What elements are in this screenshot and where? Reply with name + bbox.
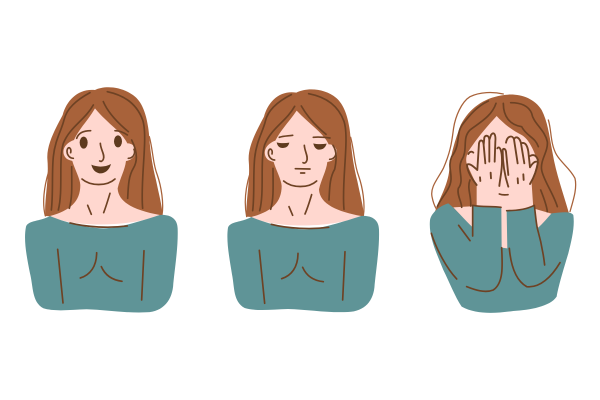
chin	[499, 191, 508, 197]
sleeve cuffs and arm lines	[431, 205, 560, 291]
neckline and shirt folds	[58, 223, 144, 303]
hair strands	[253, 94, 346, 211]
shirt	[25, 215, 178, 312]
shirt	[227, 216, 379, 312]
left hand	[467, 133, 502, 186]
right hand	[503, 137, 538, 187]
ears	[67, 148, 135, 158]
smiling mouth	[91, 164, 111, 173]
hair strands	[437, 101, 557, 212]
curly stray hair outline	[432, 92, 576, 212]
neckline and shirt folds	[259, 224, 345, 303]
figure: sad woman	[227, 89, 379, 312]
jaw and neck lines	[284, 181, 317, 215]
eyebrows	[279, 135, 330, 138]
skin: face, neck and shoulder patches	[453, 116, 553, 248]
hair strands	[51, 92, 145, 210]
shirt	[430, 203, 574, 313]
hair	[435, 95, 569, 220]
jaw and neck lines	[82, 179, 115, 214]
droopy eyes	[277, 142, 289, 148]
ears	[268, 149, 336, 160]
stray hair outline	[44, 137, 163, 216]
nose	[303, 145, 307, 163]
figure: woman covering her face	[430, 92, 576, 313]
eyes	[80, 137, 88, 149]
stray hair outline	[245, 137, 364, 217]
hair	[246, 89, 364, 221]
figure: smiling woman	[25, 87, 178, 312]
skin: face, neck and shoulders	[251, 111, 361, 225]
skin: face, neck and shoulders	[50, 108, 160, 224]
sad mouth	[295, 169, 310, 173]
nose	[100, 143, 104, 161]
hair	[45, 87, 163, 220]
